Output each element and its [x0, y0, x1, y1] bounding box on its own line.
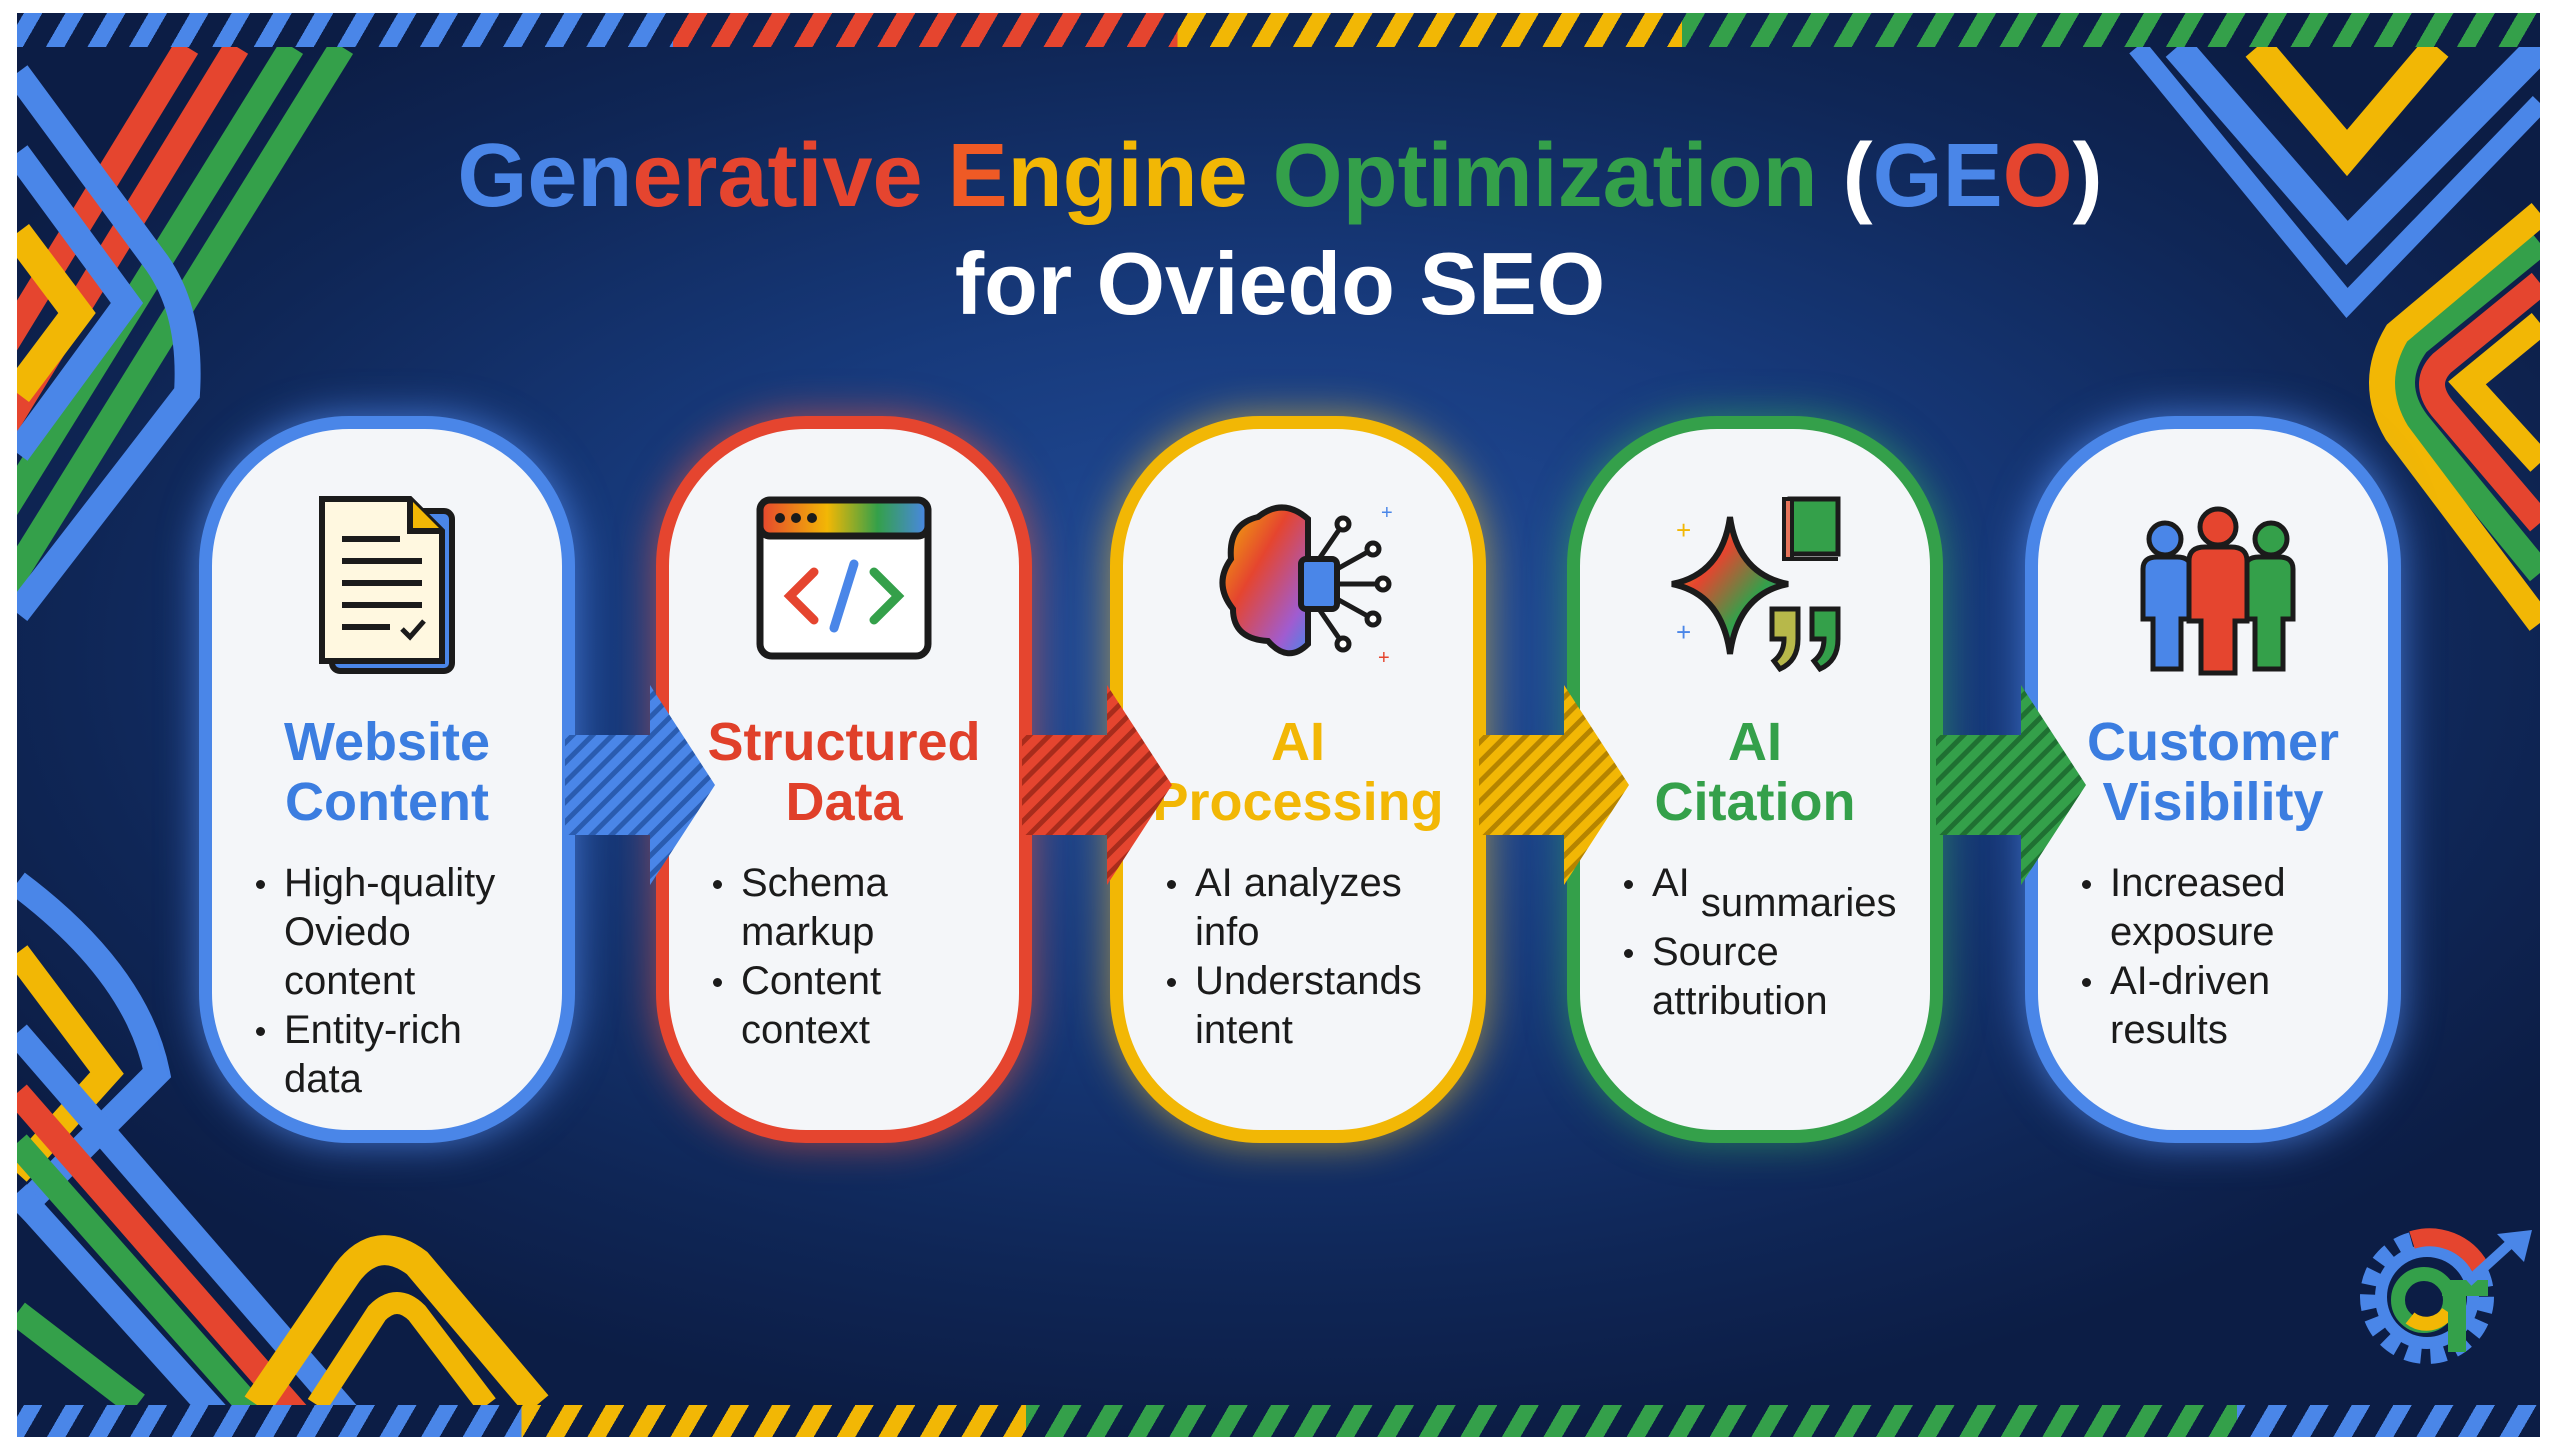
- bullets: Understands: [1195, 959, 1422, 1003]
- top stripe band: [17, 13, 2540, 47]
- bullets: [2082, 861, 2286, 1052]
- bullets: [256, 861, 496, 1101]
- bullets: Schema: [741, 861, 888, 905]
- bullets: context: [741, 1008, 870, 1052]
- bullets: results: [2110, 1008, 2228, 1052]
- bottom stripe band: [17, 1405, 2540, 1439]
- heading: Website: [284, 712, 490, 772]
- bullets: content: [284, 959, 415, 1003]
- icon: sparkle book quote: +: [1676, 515, 1691, 545]
- heading: Data: [785, 772, 903, 832]
- bullets: [1167, 861, 1422, 1052]
- panel: customer visibility: [2025, 416, 2401, 1143]
- bullets: AI analyzes: [1195, 861, 1402, 905]
- heading: [284, 712, 490, 832]
- bullets: [1624, 861, 1896, 1023]
- bullets: Oviedo: [284, 910, 411, 954]
- heading: AI: [1271, 712, 1325, 772]
- heading: Customer: [2087, 712, 2339, 772]
- heading: AI: [1728, 712, 1782, 772]
- panel: structured data: [656, 416, 1032, 1143]
- arrow 4: [1936, 685, 2086, 885]
- heading: Processing: [1152, 772, 1444, 832]
- heading: Citation: [1654, 772, 1855, 832]
- subtitle: for Oviedo SEO: [955, 234, 1605, 333]
- bullets: info: [1195, 910, 1260, 954]
- icon: brain chip: +: [1378, 647, 1390, 669]
- icon: brain chip: [1219, 502, 1393, 669]
- arrow 2: [1022, 685, 1172, 885]
- bullets: markup: [741, 910, 874, 954]
- bullets: High-quality: [284, 861, 495, 905]
- icon: document: [319, 496, 455, 674]
- bullets: Content: [741, 959, 881, 1003]
- heading: [2087, 712, 2339, 832]
- icon: brain chip: +: [1381, 502, 1393, 524]
- bullets: intent: [1195, 1008, 1293, 1052]
- bullets: AI summaries: [1652, 861, 1896, 925]
- panel: AI processing: [1110, 416, 1486, 1143]
- bullets: attribution: [1652, 979, 1828, 1023]
- logo: [2360, 1228, 2532, 1364]
- arrow 3: [1479, 685, 1629, 885]
- bullets: exposure: [2110, 910, 2275, 954]
- icon: people: [2140, 506, 2296, 676]
- title: Generative Engine Optimization (GEO): [457, 126, 2103, 226]
- panel: AI citation: [1567, 416, 1943, 1143]
- icon: code window: [756, 496, 932, 660]
- heading: [1654, 712, 1855, 832]
- icon: sparkle book quote: [1671, 496, 1840, 672]
- bullets: AI-driven: [2110, 959, 2270, 1003]
- bullets: Entity-rich: [284, 1008, 462, 1052]
- arrow 1: [565, 685, 715, 885]
- panel: website content: [199, 416, 575, 1143]
- bullets: Increased: [2110, 861, 2286, 905]
- heading: Visibility: [2102, 772, 2324, 832]
- heading: Structured: [707, 712, 981, 772]
- icon: sparkle book quote: +: [1676, 617, 1691, 647]
- heading: Content: [285, 772, 489, 832]
- heading: [707, 712, 981, 832]
- bullets: [713, 861, 888, 1052]
- bullets: data: [284, 1057, 362, 1101]
- bullets: Source: [1652, 930, 1779, 974]
- heading: [1152, 712, 1444, 832]
